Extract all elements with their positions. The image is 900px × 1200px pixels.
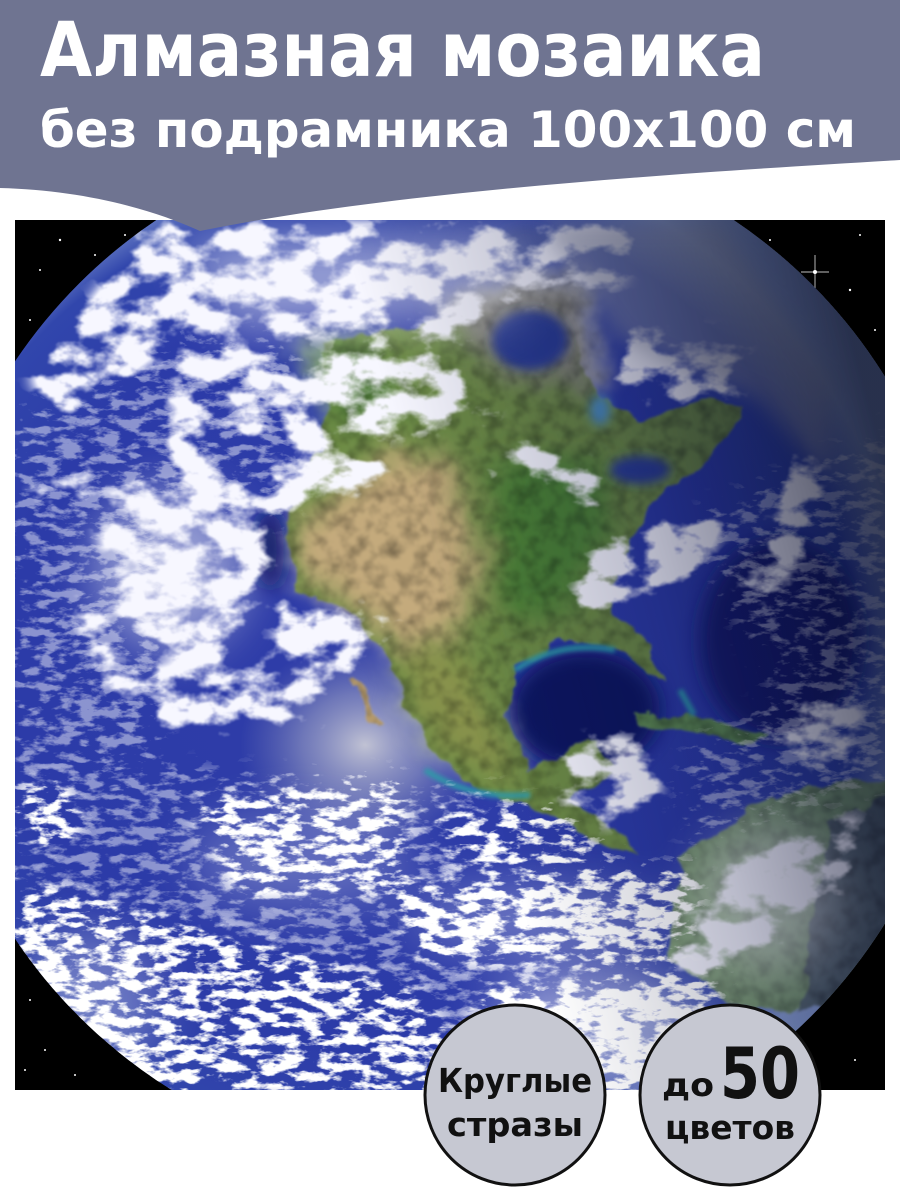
badge: up to 50 colours: до (662, 1066, 714, 1104)
header banner (0, 0, 900, 231)
title: Алмазная мозаика (40, 5, 765, 94)
ocean (15, 220, 885, 1090)
starry background (15, 220, 885, 1090)
badge: round rhinestones: Круглые (438, 1061, 592, 1100)
North America (282, 270, 770, 850)
badge: up to 50 colours: цветов (665, 1108, 795, 1147)
fine speckled cloud streams (15, 780, 720, 1095)
sun glare (250, 650, 466, 840)
globe (15, 220, 885, 1090)
grey polar haze (540, 222, 830, 480)
dark sea patches (256, 510, 860, 770)
badge: up to 50 colours (640, 1005, 820, 1185)
badge: round rhinestones: стразы (447, 1105, 583, 1144)
subtitle: без подрамника 100х100 см (40, 101, 856, 159)
blue bays in Canada (492, 227, 670, 484)
night side shading (371, 220, 885, 1090)
shallow water (425, 648, 694, 796)
picture: Earth from space (15, 220, 885, 1090)
broken coarse cloud masses (30, 225, 867, 985)
soft bright cloud bodies (20, 230, 840, 1090)
badge: round rhinestones (425, 1005, 605, 1185)
badge: up to 50 colours: 50 (720, 1033, 800, 1115)
South America (670, 780, 900, 1010)
thin cloud wisps over the ocean (15, 340, 900, 1095)
